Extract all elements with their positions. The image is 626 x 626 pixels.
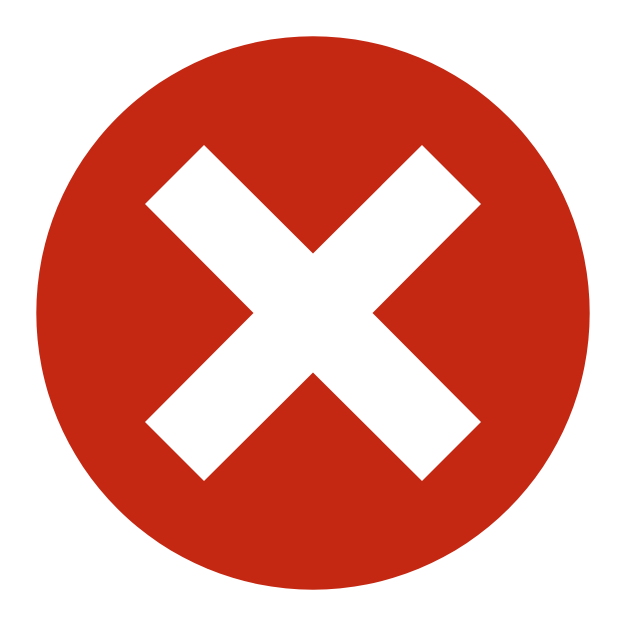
white X mark xyxy=(145,145,481,481)
red circle xyxy=(36,36,590,590)
